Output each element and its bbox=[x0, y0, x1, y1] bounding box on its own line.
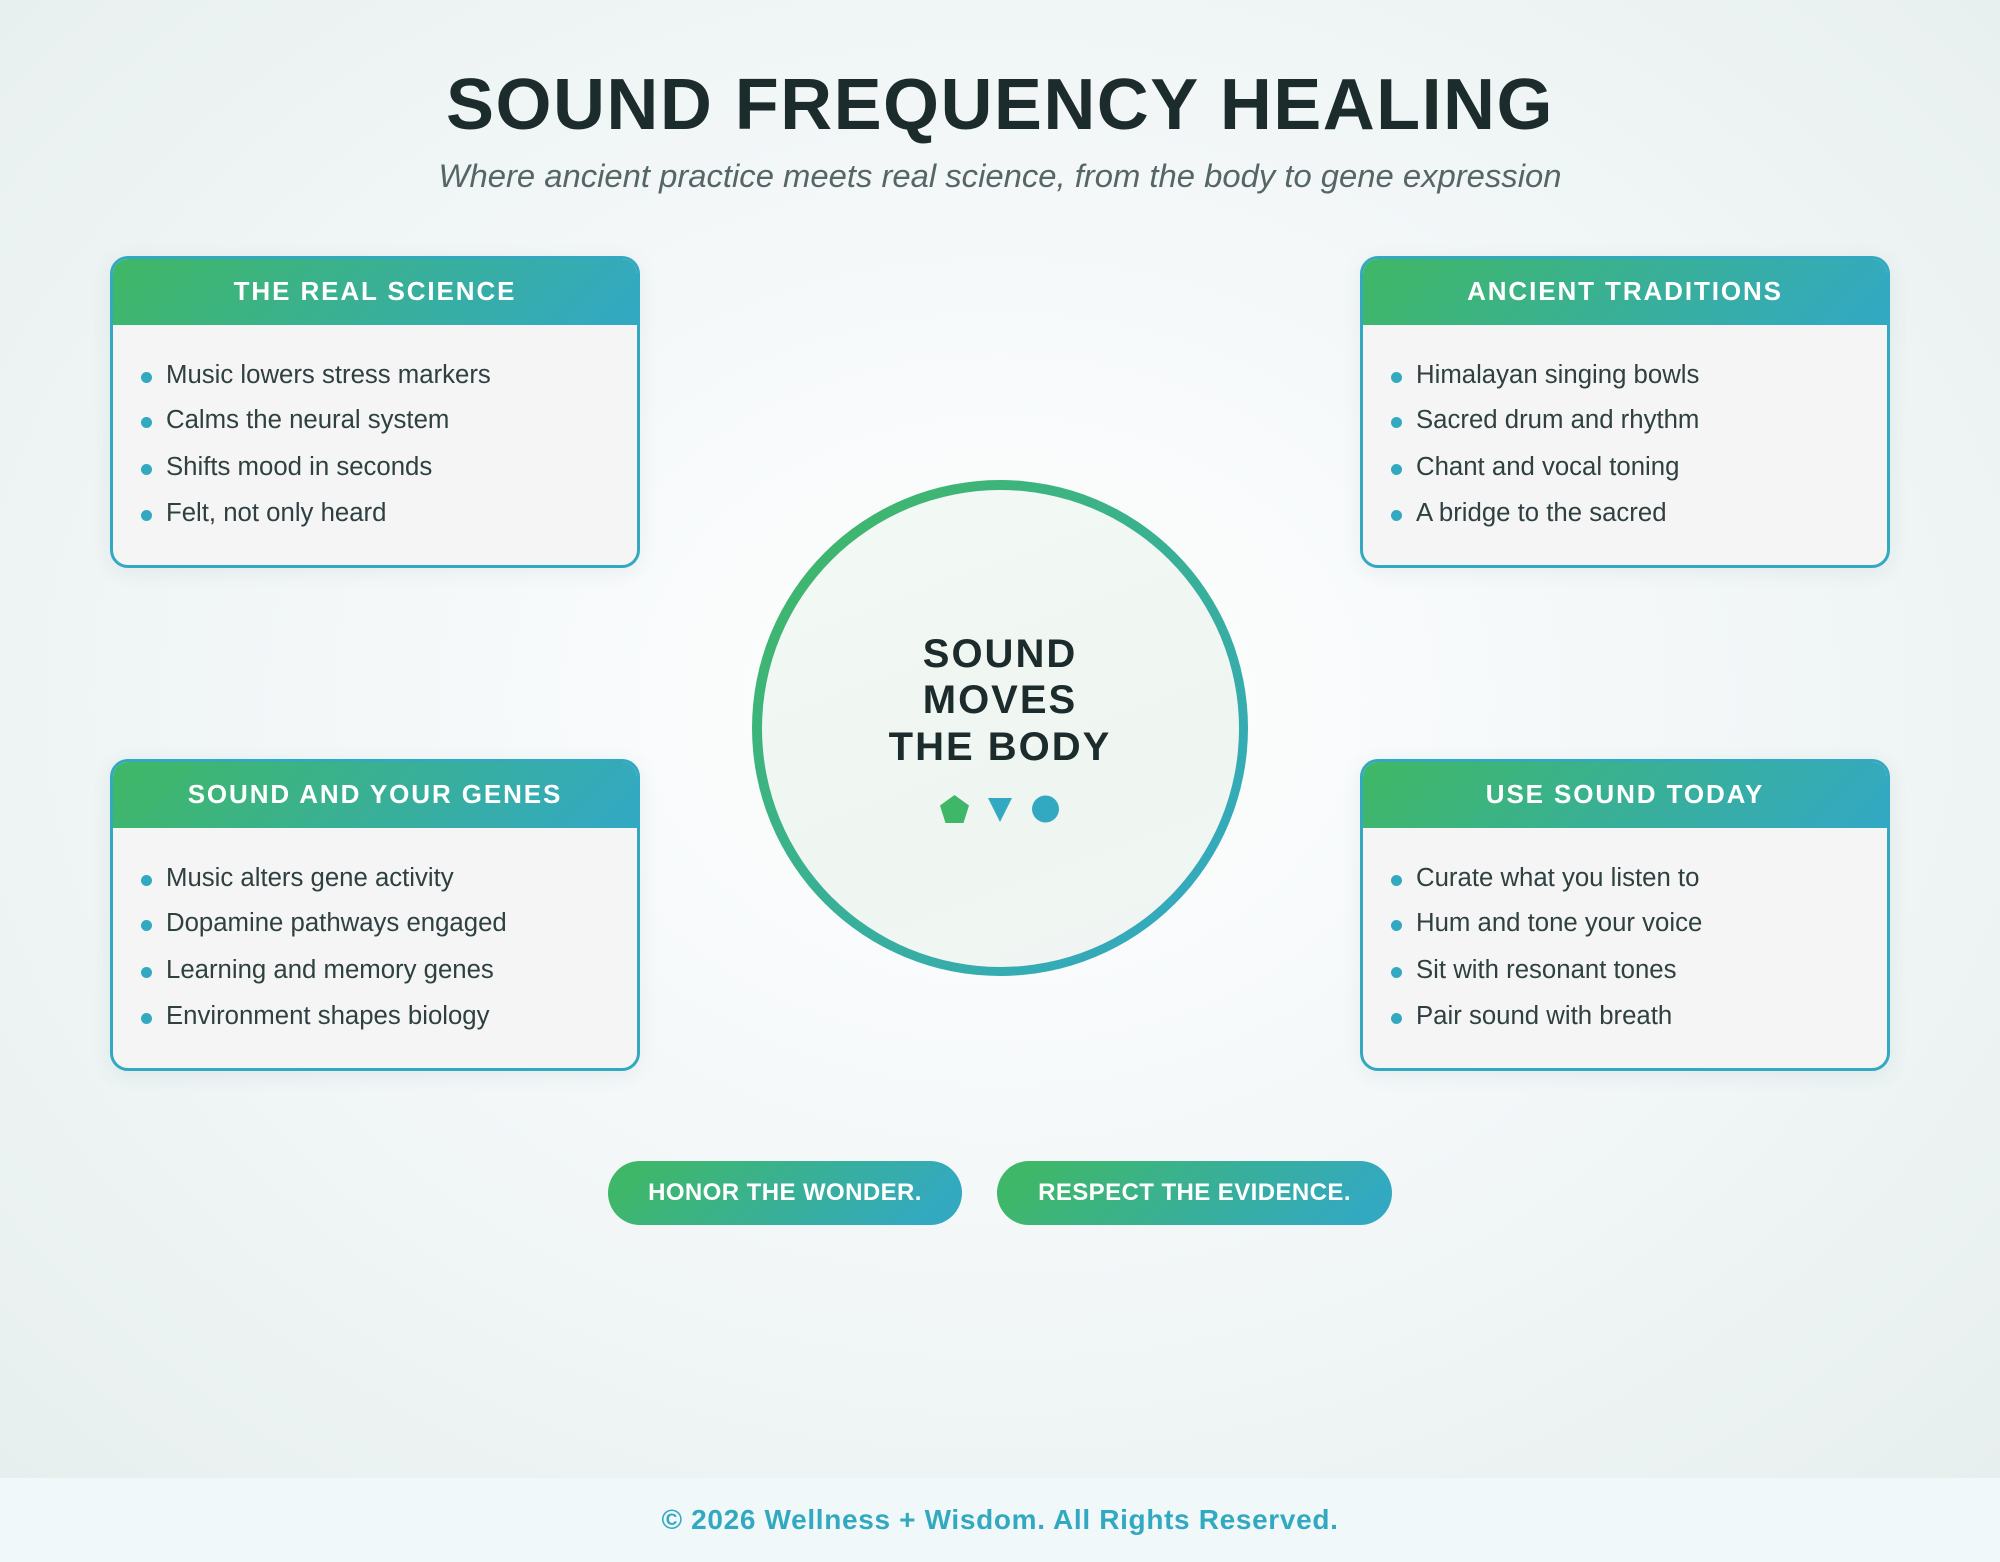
panel heading: THE REAL SCIENCE bbox=[234, 276, 516, 306]
callout: honor the wonder bbox=[608, 1161, 962, 1225]
list item: A bridge to the sacred bbox=[1416, 499, 1667, 527]
callout: respect the evidence: RESPECT THE EVIDENCE. bbox=[1038, 1179, 1351, 1206]
panel heading bbox=[113, 259, 637, 325]
list item: Dopamine pathways engaged bbox=[166, 909, 507, 937]
list item: Hum and tone your voice bbox=[1416, 909, 1702, 937]
footer bbox=[0, 1478, 2000, 1562]
subtitle: Where ancient practice meets real science, from the body to gene expression bbox=[439, 157, 1561, 194]
circle inner fill bbox=[762, 490, 1238, 966]
list item: Environment shapes biology bbox=[166, 1002, 490, 1030]
icon: triangle bbox=[988, 798, 1012, 822]
list item: Felt, not only heard bbox=[166, 499, 386, 527]
list item: Sacred drum and rhythm bbox=[1416, 406, 1699, 434]
list item: Music lowers stress markers bbox=[166, 361, 491, 389]
list item: Learning and memory genes bbox=[166, 956, 494, 984]
panel heading bbox=[113, 762, 637, 828]
panel: sound and your genes bbox=[110, 759, 640, 1071]
icon: circle bbox=[1032, 796, 1059, 822]
circle heading: SOUND bbox=[923, 632, 1077, 676]
panel: the real science bbox=[110, 256, 640, 568]
list item: Calms the neural system bbox=[166, 406, 449, 434]
circle heading: THE BODY bbox=[889, 725, 1111, 769]
list item: Pair sound with breath bbox=[1416, 1002, 1672, 1030]
circle heading bbox=[889, 632, 1111, 769]
panel: use sound today bbox=[1360, 759, 1890, 1071]
central circle bbox=[752, 480, 1248, 976]
list item: Shifts mood in seconds bbox=[166, 453, 432, 481]
callout: respect the evidence bbox=[997, 1161, 1392, 1225]
panel heading bbox=[1363, 259, 1887, 325]
icons: pentagon, triangle, circle bbox=[940, 795, 1059, 823]
list item: Sit with resonant tones bbox=[1416, 956, 1677, 984]
panel heading bbox=[1363, 762, 1887, 828]
list item: Chant and vocal toning bbox=[1416, 453, 1679, 481]
title: SOUND FREQUENCY HEALING bbox=[446, 65, 1554, 145]
callout: honor the wonder: HONOR THE WONDER. bbox=[648, 1179, 922, 1206]
list item: Curate what you listen to bbox=[1416, 864, 1699, 892]
icon: pentagon bbox=[940, 795, 969, 823]
panel heading: SOUND AND YOUR GENES bbox=[188, 779, 562, 809]
circle heading: MOVES bbox=[923, 678, 1077, 722]
panel heading: ANCIENT TRADITIONS bbox=[1467, 276, 1783, 306]
panel: ancient traditions bbox=[1360, 256, 1890, 568]
list item: Himalayan singing bowls bbox=[1416, 361, 1699, 389]
footer: © 2026 Wellness + Wisdom. All Rights Reserved. bbox=[661, 1504, 1339, 1535]
panel heading: USE SOUND TODAY bbox=[1486, 779, 1764, 809]
list item: Music alters gene activity bbox=[166, 864, 454, 892]
